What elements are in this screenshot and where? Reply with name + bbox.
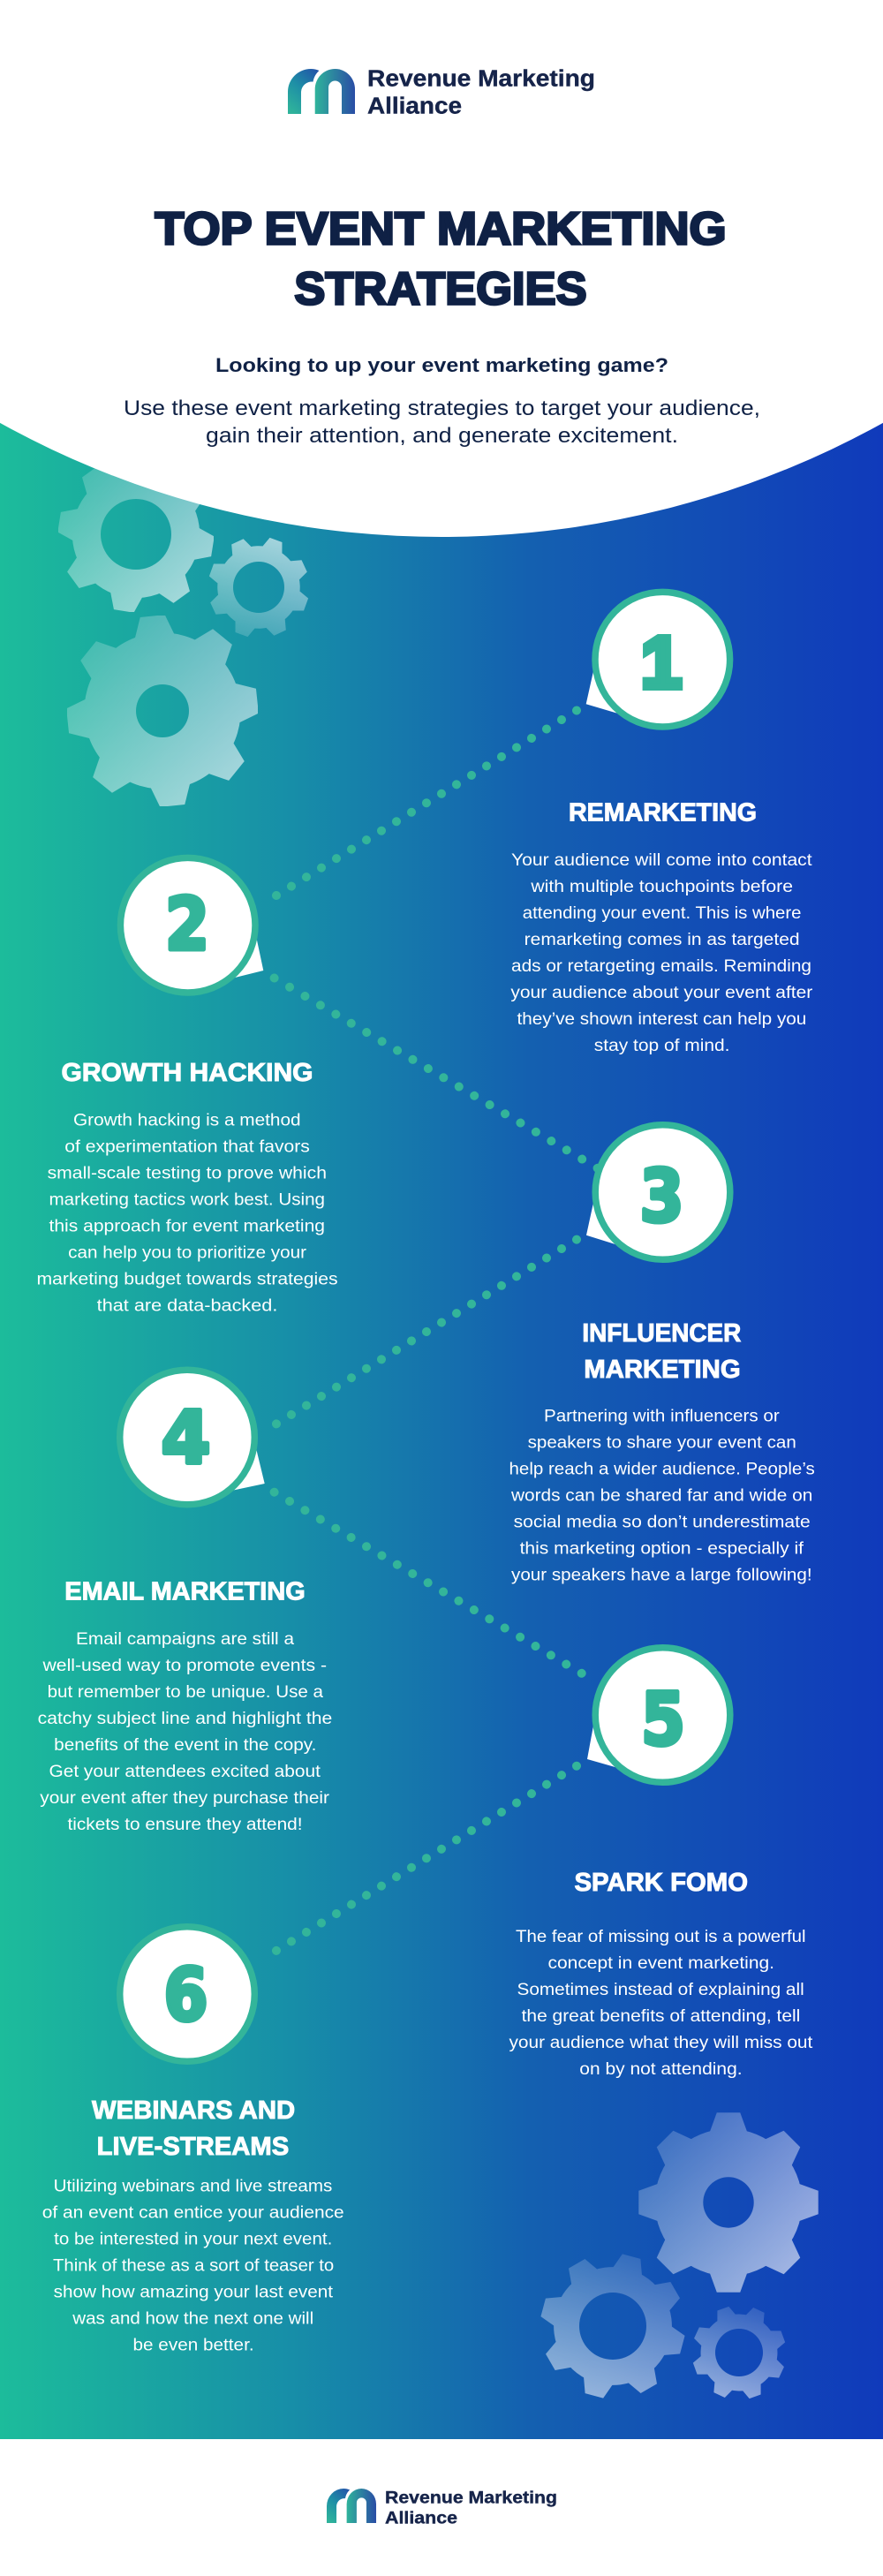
panel: webinars and live-streams: of an event can entice your audience bbox=[42, 2204, 344, 2222]
panel: email marketing: but remember to be unique. Use a bbox=[48, 1683, 323, 1702]
panel: spark fomo: SPARK FOMO bbox=[574, 1869, 748, 1897]
panel: email marketing: well-used way to promote events - bbox=[42, 1657, 327, 1675]
panel: remarketing: attending your event. This is where bbox=[523, 904, 802, 923]
panel: spark fomo: the great benefits of attending, tell bbox=[522, 2007, 800, 2026]
panel: influencer marketing: Partnering with influencers or bbox=[544, 1408, 780, 1425]
title bbox=[155, 204, 727, 315]
footer logo: Revenue Marketing bbox=[385, 2488, 557, 2507]
panel: remarketing: remarketing comes in as targeted bbox=[525, 931, 800, 949]
panel: email marketing: Email campaigns are still a bbox=[76, 1630, 294, 1649]
subtitle question: Looking to up your event marketing game? bbox=[215, 354, 668, 376]
badge 1: 1 bbox=[641, 622, 682, 703]
panel: webinars and live-streams: show how amazing your last event bbox=[54, 2284, 334, 2301]
panel: remarketing: with multiple touchpoints before bbox=[530, 878, 793, 896]
title: TOP EVENT MARKETING bbox=[155, 204, 727, 255]
panel: remarketing: REMARKETING bbox=[569, 798, 757, 827]
panel: growth hacking: small-scale testing to prove which bbox=[48, 1164, 327, 1183]
panel: influencer marketing: help reach a wider audience. People’s bbox=[509, 1461, 815, 1478]
badge 2: 2 bbox=[165, 883, 209, 967]
panel: email marketing: catchy subject line and highlight the bbox=[38, 1710, 332, 1728]
panel: spark fomo: The fear of missing out is a powerful bbox=[516, 1928, 806, 1946]
dotted connector 5 to 6 bbox=[261, 1766, 577, 1960]
badge 3 bbox=[586, 1125, 730, 1259]
icon: bottom gears bbox=[540, 2112, 819, 2399]
panel: remarketing: stay top of mind. bbox=[594, 1037, 729, 1055]
panel: email marketing: benefits of the event in the copy. bbox=[54, 1736, 316, 1755]
dotted connector 2 to 3 bbox=[275, 978, 598, 1168]
title: STRATEGIES bbox=[294, 264, 587, 315]
panel: growth hacking: that are data-backed. bbox=[97, 1296, 277, 1316]
panel: growth hacking: can help you to prioritize your bbox=[68, 1243, 307, 1263]
panel: growth hacking: of experimentation that favors bbox=[64, 1137, 310, 1157]
panel: webinars and live-streams: to be interested in your next event. bbox=[54, 2231, 332, 2248]
panel: influencer marketing: social media so don’t underestimate bbox=[514, 1514, 811, 1531]
badge 5: 5 bbox=[641, 1678, 685, 1763]
dotted connector 3 to 4 bbox=[261, 1240, 577, 1433]
panel: influencer marketing: INFLUENCER bbox=[582, 1319, 741, 1348]
badge 2 bbox=[120, 857, 263, 993]
panel: growth hacking: GROWTH HACKING bbox=[62, 1059, 313, 1087]
header logo: Revenue Marketing bbox=[367, 67, 595, 92]
intro text bbox=[124, 397, 760, 448]
panel: influencer marketing: MARKETING bbox=[584, 1356, 741, 1384]
panel: webinars and live-streams: Think of these as a sort of teaser to bbox=[53, 2257, 334, 2275]
panel: remarketing bbox=[510, 798, 813, 1055]
panel: growth hacking bbox=[37, 1059, 338, 1316]
panel: remarketing: Your audience will come into contact bbox=[511, 851, 812, 870]
intro text: Use these event marketing strategies to target your audience, bbox=[124, 397, 760, 420]
panel: spark fomo: concept in event marketing. bbox=[547, 1954, 774, 1973]
panel: webinars and live-streams: LIVE-STREAMS bbox=[97, 2133, 289, 2161]
panel: growth hacking: Growth hacking is a method bbox=[73, 1111, 301, 1130]
intro text: gain their attention, and generate excitement. bbox=[206, 424, 678, 448]
dotted connector 4 to 5 bbox=[275, 1492, 597, 1682]
badge 3: 3 bbox=[639, 1155, 683, 1239]
header logo: Alliance bbox=[367, 94, 462, 118]
panel: webinars and live-streams: was and how the next one will bbox=[72, 2310, 313, 2328]
white header curve bbox=[0, 0, 883, 537]
panel: email marketing: Get your attendees excited about bbox=[49, 1763, 321, 1781]
panel: webinars and live-streams: Utilizing webinars and live streams bbox=[54, 2178, 332, 2195]
badge 6: 6 bbox=[164, 1953, 208, 2038]
panel: email marketing: EMAIL MARKETING bbox=[64, 1578, 306, 1606]
footer logo bbox=[327, 2488, 557, 2527]
panel: spark fomo: your audience what they will miss out bbox=[509, 2034, 813, 2052]
badge 4 bbox=[120, 1370, 265, 1505]
badge 6 bbox=[120, 1927, 254, 2061]
gradient background panel bbox=[0, 415, 883, 2439]
panel: email marketing: tickets to ensure they attend! bbox=[67, 1816, 302, 1834]
panel: influencer marketing: words can be shared far and wide on bbox=[510, 1487, 812, 1505]
panel: remarketing: ads or retargeting emails. Reminding bbox=[511, 957, 811, 976]
panel: spark fomo bbox=[509, 1869, 813, 2079]
panel: spark fomo: Sometimes instead of explaining all bbox=[517, 1981, 804, 1999]
icon: top gears bbox=[58, 457, 309, 806]
panel: spark fomo: on by not attending. bbox=[579, 2060, 743, 2079]
panel: webinars and live-streams bbox=[42, 2096, 344, 2354]
badge 4: 4 bbox=[161, 1397, 210, 1480]
panel: influencer marketing bbox=[509, 1319, 815, 1584]
badge 5 bbox=[587, 1648, 730, 1782]
panel: email marketing bbox=[38, 1578, 332, 1834]
panel: growth hacking: marketing budget towards strategies bbox=[37, 1270, 338, 1289]
panel: remarketing: your audience about your event after bbox=[510, 984, 813, 1002]
panel: growth hacking: marketing tactics work best. Using bbox=[49, 1190, 325, 1210]
panel: growth hacking: this approach for event marketing bbox=[49, 1217, 325, 1236]
panel: remarketing: they’ve shown interest can help you bbox=[517, 1010, 806, 1029]
badge 1 bbox=[586, 592, 730, 727]
footer logo: Alliance bbox=[385, 2508, 457, 2527]
panel: influencer marketing: speakers to share your event can bbox=[528, 1434, 796, 1452]
header logo bbox=[288, 67, 595, 118]
panel: influencer marketing: this marketing option - especially if bbox=[520, 1540, 804, 1558]
panel: influencer marketing: your speakers have a large following! bbox=[511, 1567, 812, 1584]
dotted connector 1 to 2 bbox=[261, 710, 577, 904]
panel: webinars and live-streams: be even better. bbox=[132, 2337, 254, 2354]
panel: email marketing: your event after they purchase their bbox=[40, 1789, 330, 1808]
panel: webinars and live-streams: WEBINARS AND bbox=[92, 2096, 295, 2125]
